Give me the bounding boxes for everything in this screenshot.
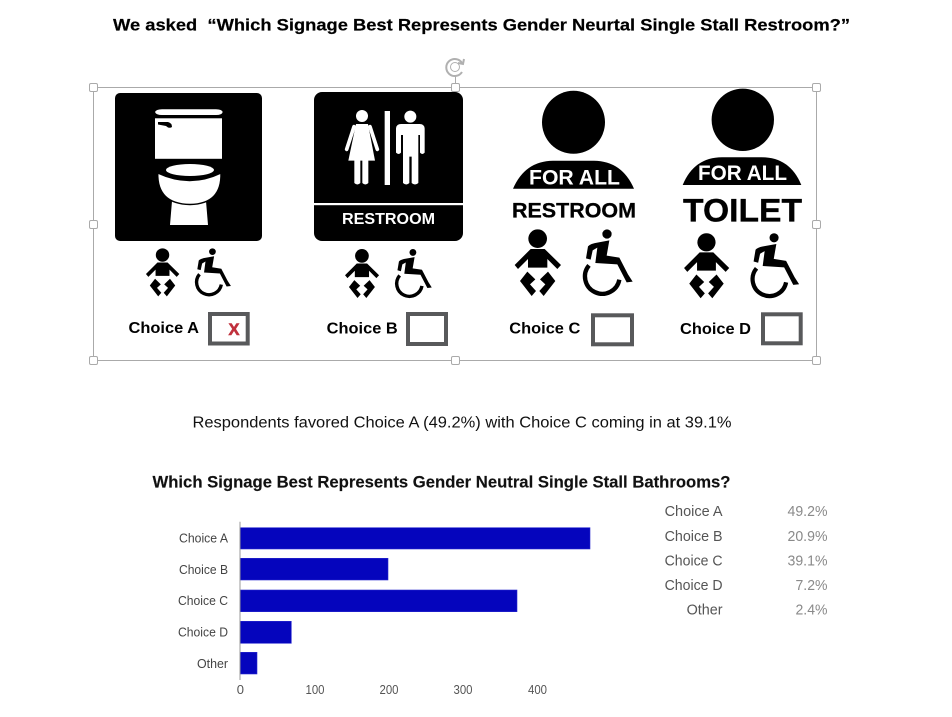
legend table of percentages: Choice D bbox=[665, 577, 723, 594]
chart heading: Which Signage Best Represents Gender Neutral Single Stall Bathrooms? bbox=[152, 473, 730, 491]
axis tick labels bbox=[237, 682, 547, 697]
icons: baby and wheelchair, choice C bbox=[515, 229, 633, 296]
legend table of percentages: 2.4% bbox=[796, 601, 828, 618]
axis tick labels: 0 bbox=[237, 682, 244, 697]
choice D label and box: Choice D bbox=[680, 321, 751, 338]
sign: choice A toilet bbox=[115, 93, 262, 241]
sign: choice C for all restroom: RESTROOM bbox=[512, 199, 636, 223]
category labels: Choice A bbox=[179, 530, 228, 545]
legend table of percentages: 49.2% bbox=[788, 503, 828, 520]
legend table of percentages: 20.9% bbox=[788, 528, 828, 545]
legend table of percentages: 39.1% bbox=[788, 552, 828, 569]
results summary text: Respondents favored Choice A (49.2%) with Choice C coming in at 39.1% bbox=[192, 414, 732, 432]
axis tick labels: 400 bbox=[528, 682, 547, 697]
choice D label and box bbox=[680, 314, 801, 343]
sign: choice D for all toilet: FOR ALL bbox=[698, 162, 787, 185]
legend table of percentages: Other bbox=[687, 601, 723, 618]
icons: baby and wheelchair, choice B bbox=[345, 249, 432, 298]
choice A label and checked box: X bbox=[228, 321, 240, 339]
choice B label and box bbox=[327, 314, 446, 344]
axis tick labels: 100 bbox=[306, 682, 324, 697]
legend table of percentages: Choice C bbox=[665, 552, 723, 569]
category labels: Other bbox=[197, 656, 229, 671]
sign: choice D for all toilet: TOILET bbox=[683, 193, 802, 229]
choice A label and checked box bbox=[128, 314, 248, 344]
axis tick labels: 200 bbox=[380, 682, 398, 697]
category labels: Choice B bbox=[179, 562, 228, 577]
bars bbox=[240, 528, 590, 674]
icons: baby and wheelchair, choice D bbox=[684, 233, 799, 298]
legend table of percentages bbox=[665, 503, 828, 618]
category labels: Choice D bbox=[178, 625, 228, 640]
selection frame with handles bbox=[90, 59, 820, 364]
sign: choice C for all restroom: FOR ALL bbox=[529, 166, 620, 190]
sign: choice C for all restroom bbox=[512, 91, 636, 223]
choice C label and box bbox=[509, 315, 632, 344]
legend table of percentages: Choice B bbox=[665, 528, 723, 545]
choice B label and box: Choice B bbox=[327, 320, 398, 337]
choice A label and checked box: Choice A bbox=[128, 320, 199, 337]
bar chart bbox=[178, 522, 590, 697]
category labels: Choice C bbox=[178, 593, 228, 608]
icon: woman and man figures bbox=[347, 110, 425, 185]
sign: choice D for all toilet bbox=[683, 89, 802, 229]
legend table of percentages: Choice A bbox=[665, 503, 723, 520]
category labels bbox=[178, 530, 229, 671]
icons: baby and wheelchair, choice A bbox=[146, 248, 231, 296]
axis tick labels: 300 bbox=[454, 682, 472, 697]
choice C label and box: Choice C bbox=[509, 320, 581, 337]
sign: choice B restroom: RESTROOM bbox=[342, 211, 435, 228]
legend table of percentages: 7.2% bbox=[796, 577, 828, 594]
sign: choice B restroom bbox=[314, 92, 463, 241]
title: We asked “Which Signage Best Represents Gender Neurtal Single Stall Restroom?” bbox=[113, 16, 850, 34]
